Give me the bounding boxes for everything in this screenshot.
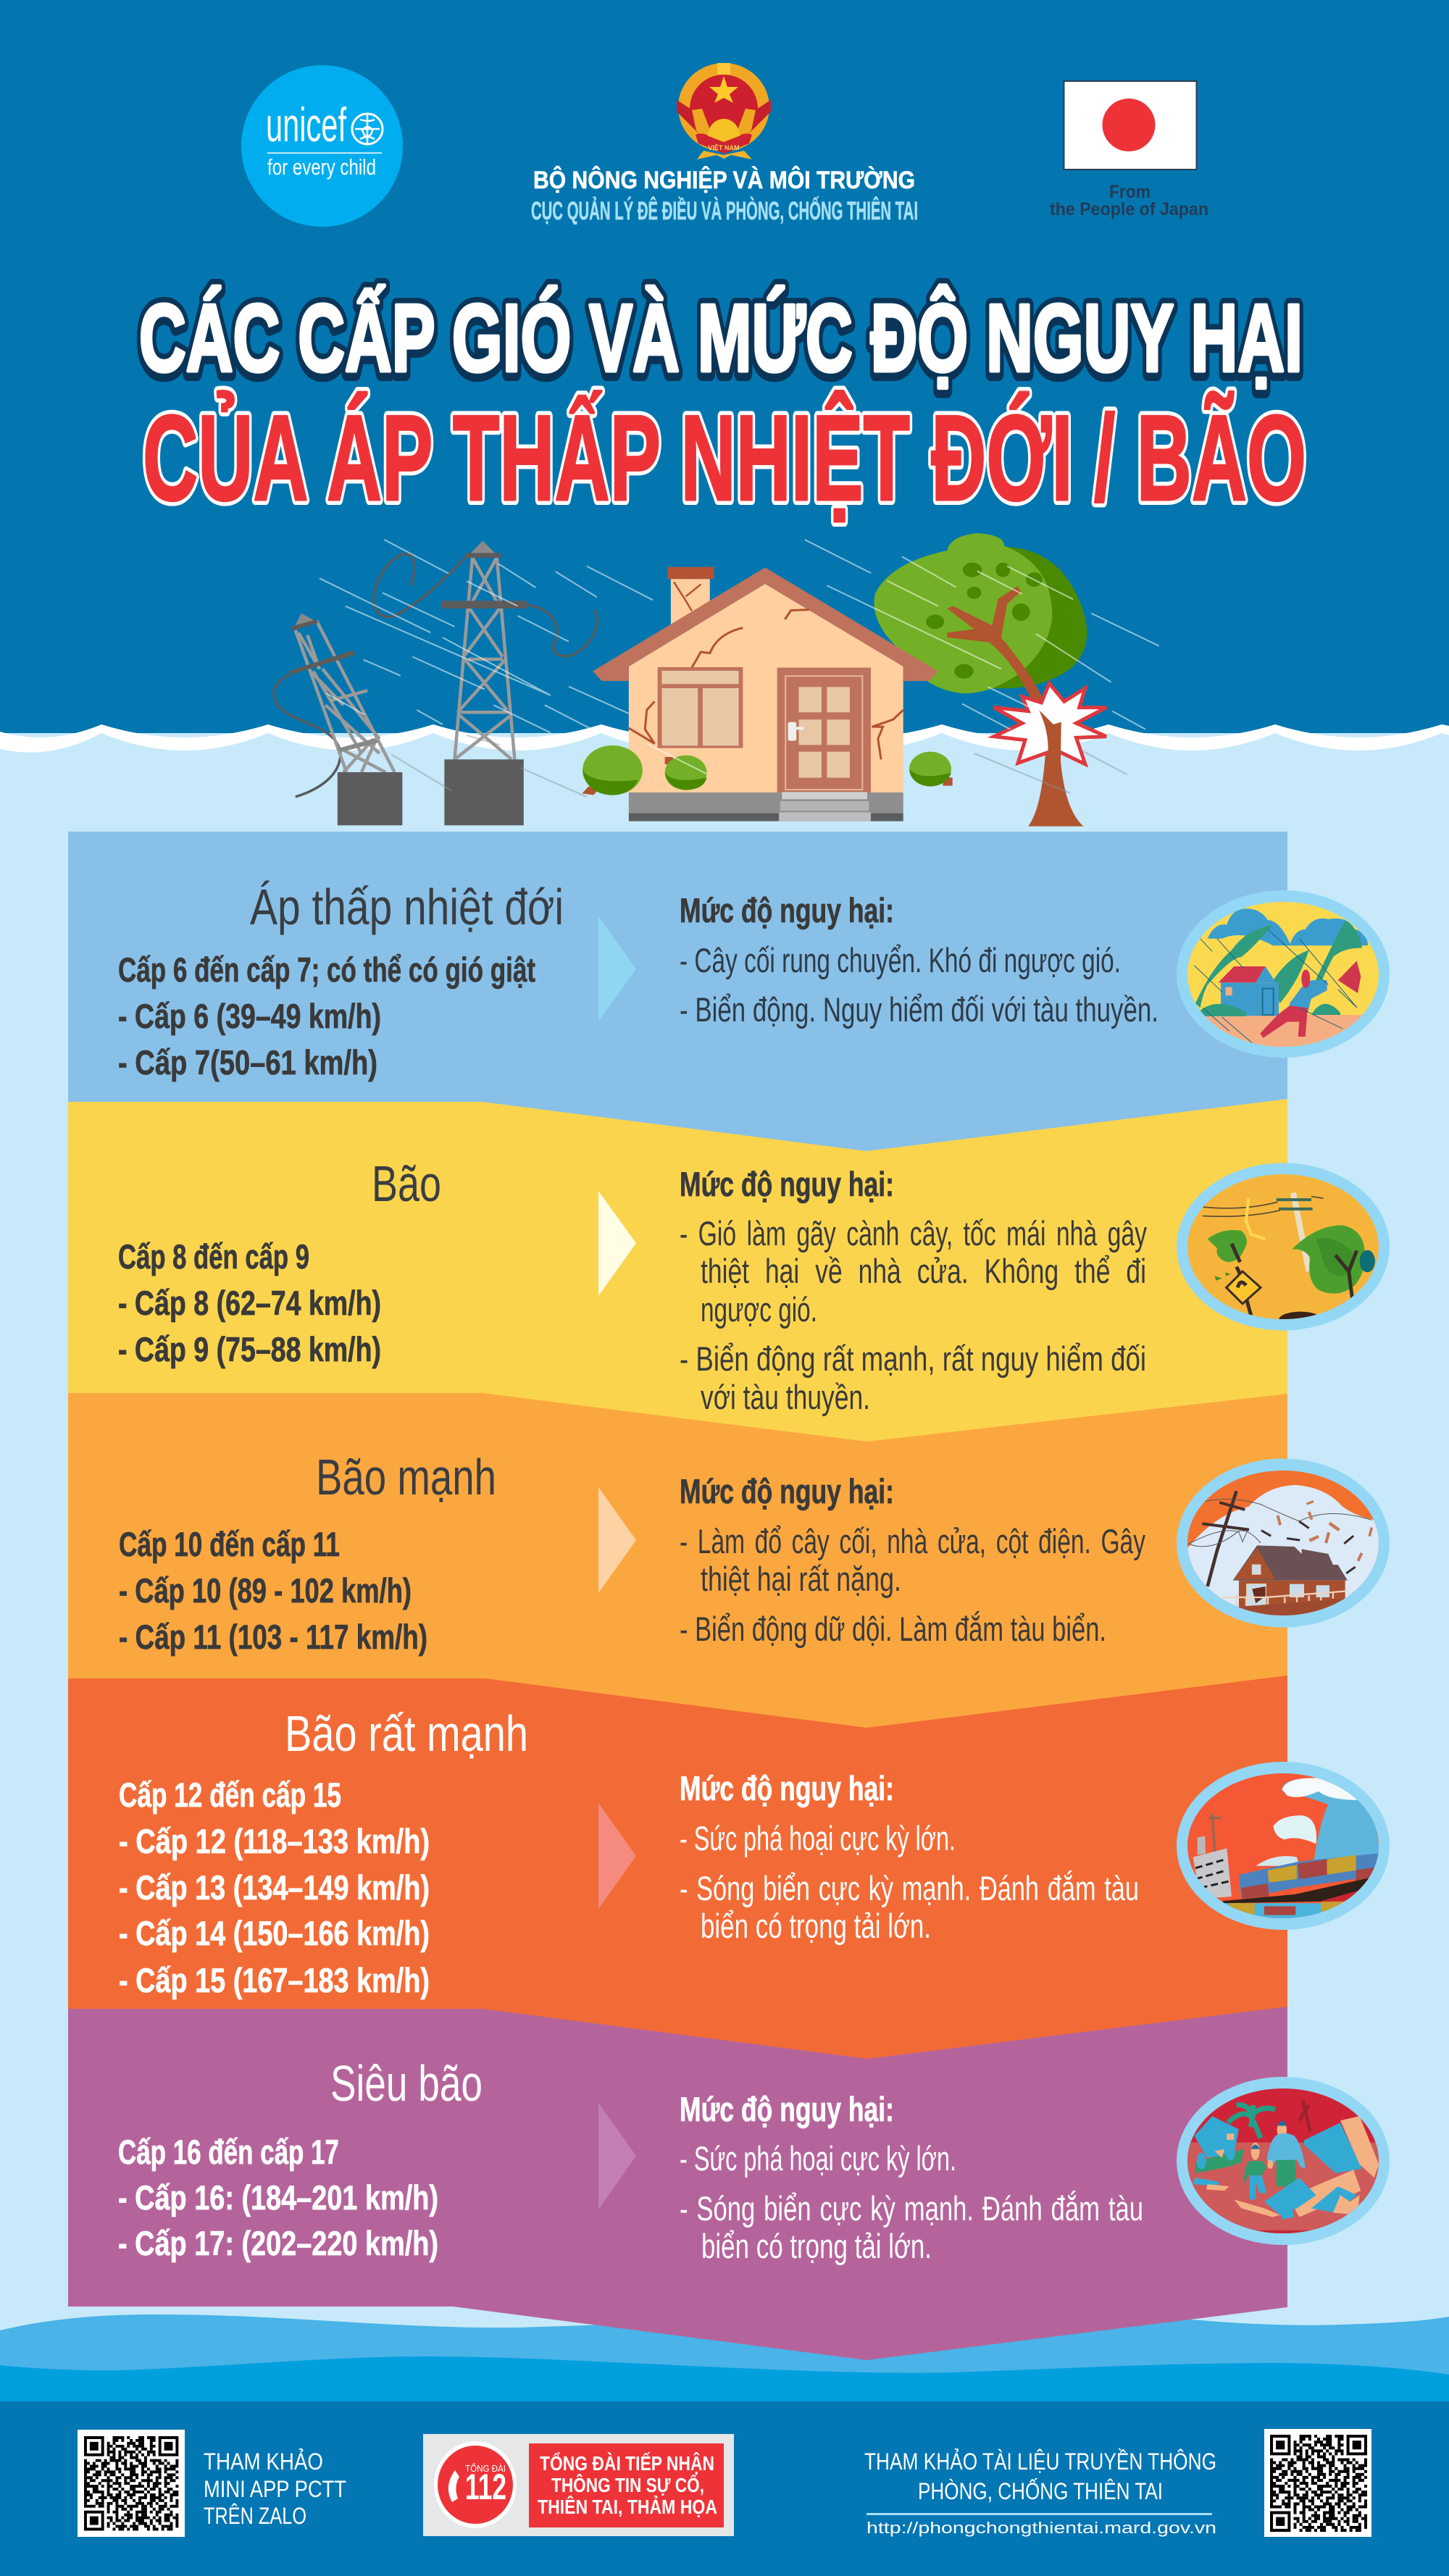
wind levels: - Cấp 6 (39–49 km/h): [118, 997, 381, 1035]
wind levels: - Cấp 17: (202–220 km/h): [118, 2224, 438, 2262]
hazard description: - Biển động dữ dội. Làm đắm tàu biển.: [680, 1610, 1106, 1648]
hazard description: - Biển động rất mạnh, rất nguy hiểm đối: [680, 1339, 1146, 1378]
hazard description: - Làm đổ cây cối, nhà cửa, cột điện. Gây: [680, 1522, 1145, 1560]
heading: Bão rất mạnh: [285, 1705, 528, 1762]
wires: [274, 554, 597, 797]
hazard description: [680, 1769, 1139, 1945]
wind levels: Cấp 6 đến cấp 7; có thể có gió giật: [118, 950, 535, 989]
faint rain on water: [391, 735, 1127, 797]
hazard description: ngược gió.: [701, 1290, 817, 1329]
hazard description: - Sức phá hoại cực kỳ lớn.: [680, 1819, 956, 1857]
roof: [593, 567, 938, 681]
From the People of Japan: the People of Japan: [1050, 199, 1208, 219]
footer text: disaster-prevention resources: PHÒNG, CHỐNG THIÊN TAI: [918, 2478, 1163, 2504]
wind levels: [118, 1237, 381, 1368]
arrow: [598, 916, 636, 1021]
logo: national emblem: VIỆT NAM: [708, 143, 740, 151]
logo: national emblem: [677, 63, 771, 159]
hazard description: biển có trọng tải lớn.: [701, 1907, 931, 1945]
icon: storm with broken pole and trees: [1177, 1163, 1390, 1330]
door: [777, 668, 871, 793]
steps: [782, 792, 867, 802]
panel: Bão rất mạnh background: [68, 1630, 1287, 2059]
rain: [320, 540, 1159, 774]
logo: Japan flag: [1064, 81, 1197, 170]
bottom wave: deep blue: [0, 2357, 1449, 2405]
hazard description: - Cây cối rung chuyển. Khó đi ngược gió.: [680, 941, 1121, 979]
wind levels: [118, 2133, 438, 2262]
arrow: [598, 1803, 636, 1909]
footer text: mini app: TRÊN ZALO: [204, 2503, 306, 2529]
hazard description: Mức độ nguy hại:: [680, 1769, 894, 1807]
hazard description: thiệt hại về nhà cửa. Không thể đi: [701, 1252, 1146, 1290]
heading: Bão mạnh: [316, 1449, 496, 1505]
wind levels: - Cấp 15 (167–183 km/h): [119, 1961, 430, 1999]
hazard description: [680, 1472, 1145, 1648]
hotline 112 badge: THÔNG TIN SỰ CỐ,: [551, 2473, 704, 2496]
foundation: [629, 793, 903, 814]
footer text: disaster-prevention resources: THAM KHẢO TÀI LIỆU TRUYỀN THÔNG: [864, 2449, 1216, 2475]
footer text: mini app: [204, 2449, 346, 2529]
footer text: mini app: THAM KHẢO: [204, 2449, 323, 2475]
wind levels: - Cấp 7(50–61 km/h): [118, 1043, 377, 1082]
icon: damaged house and flying debris: [1177, 1459, 1390, 1627]
QR code: resources website: [1264, 2429, 1371, 2537]
wind levels: - Cấp 9 (75–88 km/h): [118, 1330, 381, 1368]
arrow: [598, 1191, 636, 1296]
heading: Bão: [372, 1155, 441, 1212]
hazard description: - Sóng biển cực kỳ mạnh. Đánh đắm tàu: [680, 2189, 1143, 2228]
bottom wave: mid blue: [0, 2313, 1449, 2405]
hazard description: - Gió làm gãy cành cây, tốc mái nhà gây: [680, 1214, 1147, 1253]
trunk through burst: [1039, 710, 1061, 763]
hazard description: Mức độ nguy hại:: [680, 1165, 894, 1203]
wind levels: [119, 1776, 430, 1999]
light blue water wave: [0, 733, 1449, 833]
hotline 112 badge: TỔNG ĐÀI TIẾP NHẬN: [540, 2452, 714, 2475]
From the People of Japan: From: [1109, 182, 1151, 202]
wind levels: [119, 1525, 427, 1656]
hazard description: Mức độ nguy hại:: [680, 2090, 894, 2128]
hotline 112 badge: [423, 2434, 734, 2536]
wind levels: [118, 950, 535, 1082]
panel: Áp thấp nhiệt đới background: [68, 832, 1287, 1151]
hazard description: - Biển động. Nguy hiểm đối với tàu thuyền.: [680, 990, 1158, 1029]
illustration: storm scene with towers, house and tree: [274, 533, 1159, 827]
panel: Bão mạnh background: [68, 1362, 1287, 1728]
heading: Siêu bão: [330, 2055, 483, 2112]
chimney: [671, 578, 710, 627]
impact burst: [994, 683, 1106, 764]
wind levels: - Cấp 16: (184–201 km/h): [118, 2178, 438, 2217]
adult: [1277, 2123, 1287, 2134]
logo: UNICEF: [241, 65, 403, 227]
hotline 112 badge: TỔNG ĐÀI: [465, 2463, 506, 2474]
logo: UNICEF: unicef: [266, 98, 346, 151]
hazard description: [680, 2090, 1143, 2265]
hazard description: [680, 1165, 1147, 1416]
hazard description: biển có trọng tải lớn.: [701, 2227, 932, 2265]
icon: huge wave and sinking container ship: [1177, 1762, 1390, 1930]
hazard description: thiệt hại rất nặng.: [701, 1560, 901, 1598]
wind levels: - Cấp 13 (134–149 km/h): [119, 1868, 430, 1907]
walls: [629, 584, 903, 793]
wind levels: - Cấp 12 (118–133 km/h): [119, 1822, 430, 1860]
house: [593, 567, 938, 821]
panel content: Bão rất mạnh: [119, 1705, 1139, 1999]
From the People of Japan: [1050, 182, 1208, 219]
footer text: disaster-prevention resources: http://phongchongthientai.mard.gov.vn: [867, 2519, 1216, 2537]
hazard description: [680, 891, 1158, 1029]
wind levels: - Cấp 14 (150–166 km/h): [119, 1914, 430, 1952]
panel content: Bão mạnh: [119, 1449, 1145, 1656]
cracks: [629, 610, 903, 759]
panel: Bão background: [68, 1087, 1287, 1442]
icon: family among destroyed buildings: [1177, 2077, 1390, 2245]
wind levels: Cấp 10 đến cấp 11: [119, 1525, 340, 1563]
child: [1251, 2143, 1260, 2160]
upright tower: [441, 541, 527, 825]
arrow: [598, 2103, 636, 2209]
hotline 112 badge: 112: [465, 2467, 506, 2507]
wind levels: Cấp 12 đến cấp 15: [119, 1776, 341, 1814]
hotline 112 badge: THIÊN TAI, THẢM HỌA: [538, 2495, 717, 2518]
footer text: disaster-prevention resources: [864, 2449, 1216, 2537]
hazard description: Mức độ nguy hại:: [680, 1472, 894, 1510]
window: [658, 667, 743, 748]
hazard description: với tàu thuyền.: [701, 1378, 870, 1416]
tilted tower: [288, 614, 402, 825]
panel content: Bão: [118, 1155, 1147, 1416]
wind levels: Cấp 16 đến cấp 17: [118, 2133, 339, 2171]
footer band: [0, 2401, 1449, 2576]
wind levels: - Cấp 10 (89 - 102 km/h): [119, 1571, 412, 1610]
heading: Áp thấp nhiệt đới: [250, 879, 564, 935]
wind levels: - Cấp 11 (103 - 117 km/h): [119, 1618, 427, 1656]
wind levels: - Cấp 8 (62–74 km/h): [118, 1284, 381, 1322]
logo: UNICEF: for every child: [267, 154, 376, 180]
ministry name: BỘ NÔNG NGHIỆP VÀ MÔI TRƯỜNG: [533, 166, 915, 194]
hazard description: Mức độ nguy hại:: [680, 891, 894, 929]
hazard description: - Sóng biển cực kỳ mạnh. Đánh đắm tàu: [680, 1869, 1139, 1907]
tree: [874, 533, 1087, 827]
icon: wind scene with house and person: [1177, 890, 1390, 1058]
bushes: [582, 745, 953, 795]
white wave crest: [0, 724, 1449, 797]
footer text: mini app: MINI APP PCTT: [204, 2476, 346, 2502]
hazard description: - Sức phá hoại cực kỳ lớn.: [680, 2139, 956, 2178]
panel content: Siêu bão: [118, 2055, 1143, 2265]
panel: Siêu bão background: [68, 1956, 1287, 2360]
background: dark blue header: [0, 0, 1449, 733]
department name: CỤC QUẢN LÝ ĐÊ ĐIỀU VÀ PHÒNG, CHỐNG THIÊN TAI: [531, 196, 918, 225]
QR code: Zalo mini app: [78, 2430, 185, 2537]
arrow: [598, 1487, 636, 1593]
debris: [1234, 2199, 1280, 2217]
wind levels: Cấp 8 đến cấp 9: [118, 1237, 309, 1276]
panel content: Áp thấp nhiệt đới: [118, 879, 1158, 1082]
